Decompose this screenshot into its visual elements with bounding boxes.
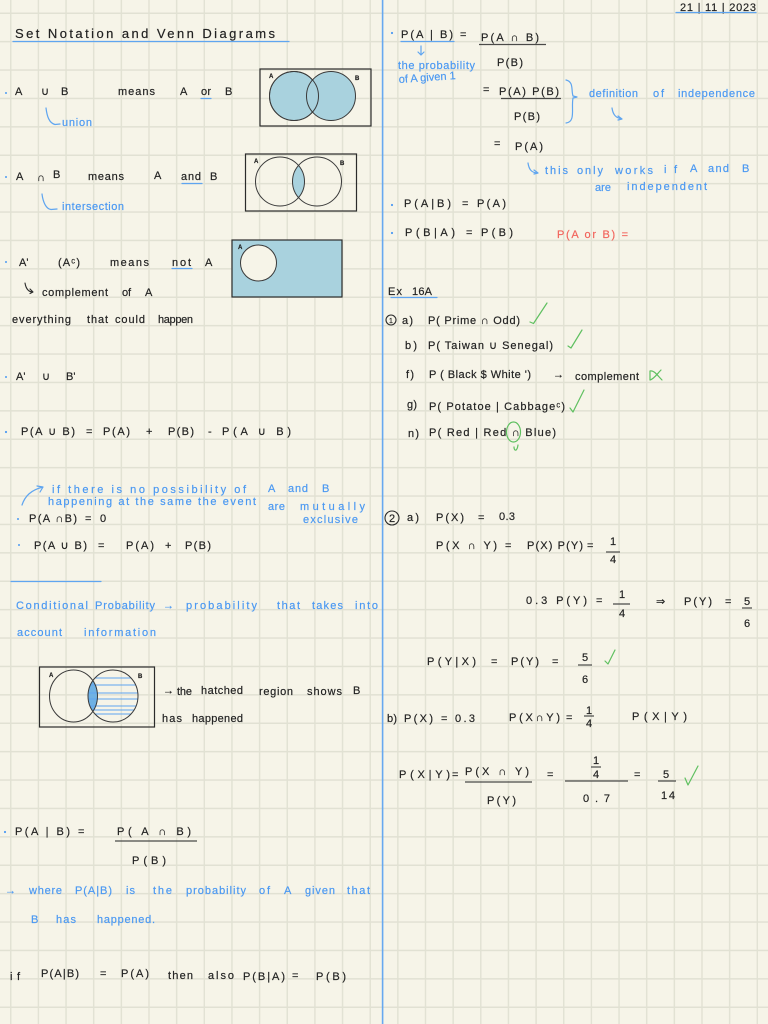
A' union B': ∪	[42, 371, 50, 383]
conditional probability heading: information	[84, 627, 156, 639]
exercise 2a working: 1	[610, 536, 616, 548]
title: Set Notation and Venn Diagrams	[15, 26, 276, 41]
hatched region note: →	[163, 685, 174, 697]
exercise 2a working: =	[725, 596, 731, 608]
venn diagram: hatched B: B	[138, 674, 143, 680]
union definition: or	[201, 86, 211, 98]
intersection definition: ∩	[37, 172, 45, 184]
conditional derivation: P(B)	[497, 57, 523, 69]
exercise 2b working: =	[566, 712, 572, 724]
complement definition: means	[110, 257, 150, 269]
formula explanation: has	[56, 914, 76, 926]
union definition: A	[15, 86, 23, 98]
hatched region note: region	[259, 686, 293, 698]
exercise 2a working: P(Y)	[684, 596, 712, 608]
exercise 1 answers	[386, 303, 662, 450]
mutually exclusive note: if there is no possibility of	[52, 484, 247, 496]
mutually exclusive note: exclusive	[303, 514, 358, 526]
section divider	[11, 580, 101, 582]
complement definition: A	[205, 257, 213, 269]
venn diagram: intersection: A	[254, 159, 259, 165]
intersection definition: means	[88, 171, 124, 183]
independence statement	[10, 968, 346, 983]
annotation: only works if independent: only	[577, 165, 604, 177]
mutually exclusive formulas: +	[165, 540, 171, 552]
annotation: only works if independent: this	[545, 165, 568, 177]
conditional probability formula: P( A ∩ B)	[117, 826, 191, 838]
venn diagram: union: A	[269, 74, 274, 80]
mutually exclusive formulas	[17, 513, 211, 552]
exercise 2a working: =	[478, 512, 484, 524]
conditional probability formula: P(B)	[132, 855, 166, 867]
mutually exclusive formulas: P(A)	[126, 540, 154, 552]
union definition	[5, 86, 232, 129]
exercise 2b working: =	[634, 769, 640, 781]
addition rule: =	[86, 426, 92, 438]
formula explanation: →	[5, 885, 16, 897]
date: 21 | 11 | 2023	[680, 2, 756, 14]
A' union B': A'	[16, 371, 25, 383]
exercise 1 answers: P( Taiwan ∪ Senegal)	[428, 340, 553, 352]
annotation: probability of A given B	[398, 46, 476, 86]
exercise 2b working: =	[441, 713, 447, 725]
exercise 2a working: 4	[619, 608, 625, 620]
question number 1: 1	[389, 318, 393, 325]
formula explanation: happened.	[97, 914, 155, 926]
exercise 2a working	[385, 511, 752, 686]
exercise heading: Ex	[388, 286, 402, 298]
exercise 1 answers: complement	[575, 371, 639, 383]
mutually exclusive note	[22, 483, 366, 526]
complement definition: everything	[12, 314, 71, 326]
annotation: only works if independent: works	[614, 165, 654, 177]
exercise 2a working: 0.3	[499, 511, 515, 523]
formula explanation: that	[347, 885, 370, 897]
exercise 1 answers: n)	[408, 428, 419, 440]
exercise 2b working: 4	[586, 718, 592, 730]
venn diagram: complement: A	[238, 245, 243, 251]
complement definition: (Aᶜ)	[58, 257, 80, 269]
exercise 2a working: P(Y|X)	[427, 656, 476, 668]
intersection definition: and	[181, 171, 201, 183]
formula explanation: given	[305, 885, 335, 897]
exercise 2b working: P(X ∩ Y)	[465, 766, 529, 778]
exercise 2a working: =	[587, 540, 593, 552]
hatched region note: shows	[307, 686, 342, 698]
mutually exclusive formulas: P(A ∩B)	[29, 513, 77, 525]
venn diagram: union: B	[355, 76, 360, 82]
exercise 1 answers: b)	[405, 340, 417, 352]
hatched region note: happened	[192, 713, 243, 725]
red note: P(A or B) =	[557, 229, 628, 241]
exercise 2b working: 0.7	[583, 793, 610, 805]
conditional probability heading: Probability	[95, 600, 156, 612]
annotation: only works if independent: if	[664, 164, 678, 176]
independence statement: =	[292, 970, 298, 982]
hatched region note: hatched	[201, 685, 243, 697]
exercise 2b working: 4	[593, 769, 599, 781]
exercise 2a working: 6	[582, 674, 588, 686]
exercise 2b working	[387, 705, 698, 807]
exercise 2b working: b)	[387, 713, 397, 725]
venn diagram: complement	[232, 240, 342, 297]
mutually exclusive formulas: =	[85, 513, 91, 525]
formula explanation: of	[259, 885, 271, 897]
annotation: only works if independent: independent	[627, 181, 707, 193]
intersection definition: A	[16, 171, 24, 183]
annotation: only works if independent: and	[708, 163, 729, 175]
exercise 2b working: P(X|Y)	[399, 769, 450, 781]
conditional derivation: P(A)	[515, 141, 543, 153]
intersection definition	[5, 169, 217, 213]
conditional derivation: =	[460, 29, 466, 41]
exercise 2a working: P(Y)	[511, 656, 539, 668]
annotation: only works if independent: are	[595, 182, 611, 194]
conditional probability heading: that	[277, 600, 300, 612]
mutually exclusive formulas: 0	[100, 513, 106, 525]
exercise 2a working: P(X)	[436, 512, 464, 524]
conditional derivation: =	[483, 84, 489, 96]
complement definition: complement	[42, 287, 108, 299]
complement definition	[5, 257, 213, 326]
hatched region note	[162, 685, 360, 725]
exercise 2a working: 1	[619, 589, 625, 601]
venn diagram: hatched B: A	[49, 673, 54, 679]
union definition: ∪	[41, 86, 49, 98]
independence statement: if	[10, 971, 21, 983]
conditional derivation: P(B)	[514, 111, 540, 123]
independence results: =	[466, 227, 472, 239]
complement definition: happen	[158, 314, 193, 326]
independence results: P(B|A)	[405, 227, 455, 239]
A' union B'	[5, 371, 75, 383]
question number 1	[386, 315, 396, 325]
exercise 2b working: P(Y)	[487, 795, 516, 807]
exercise 2b working: P(X|Y)	[632, 711, 687, 723]
union definition: B	[225, 86, 232, 98]
exercise 1 answers: P ( Black $ White ')	[429, 369, 531, 381]
conditional derivation: P(A) P(B)	[499, 86, 559, 98]
exercise 2a working: 4	[610, 554, 616, 566]
exercise heading	[388, 286, 437, 298]
mutually exclusive note: mutually	[300, 501, 366, 513]
formula explanation: where	[28, 885, 62, 897]
conditional probability heading: account	[17, 627, 62, 639]
union definition: A	[180, 86, 188, 98]
conditional probability formula	[4, 826, 197, 867]
exercise 2a working: P(X) P(Y)	[527, 540, 583, 552]
independence statement: P(B)	[316, 971, 346, 983]
exercise 2b working: 0.3	[455, 713, 475, 725]
addition rule: P(A ∪ B)	[222, 426, 291, 438]
exercise 1 answers: g)	[407, 399, 417, 411]
exercise 1 answers: a)	[402, 315, 413, 327]
formula explanation: P(A|B)	[75, 885, 112, 897]
conditional derivation: P(A ∩ B)	[481, 32, 539, 44]
exercise 2b working: 1	[586, 705, 592, 717]
conditional probability formula: =	[78, 826, 84, 838]
A' union B': B'	[66, 371, 75, 383]
exercise 2b working: =	[452, 769, 458, 781]
addition rule	[5, 426, 291, 438]
conditional probability heading: →	[163, 600, 174, 612]
exercise 2b working: P(X)	[404, 713, 433, 725]
formula explanation: B	[31, 914, 38, 926]
exercise 2b working: 14	[661, 790, 675, 802]
mutually exclusive note: A	[268, 483, 276, 495]
intersection definition: intersection	[62, 201, 124, 213]
independence results: P(A)	[477, 198, 506, 210]
hatched region note: B	[353, 685, 360, 697]
annotation: probability of A given B: the probability	[398, 60, 476, 72]
annotation: probability of A given B: of A given 1	[398, 70, 456, 86]
exercise 2a working: 0.3 P(Y)	[526, 595, 587, 607]
union definition: union	[62, 117, 92, 129]
exercise 2a working: =	[491, 656, 497, 668]
formula explanation: probability	[186, 885, 246, 897]
complement definition: could	[115, 314, 145, 326]
conditional probability heading: into	[355, 600, 378, 612]
mutually exclusive formulas: P(B)	[185, 540, 211, 552]
exercise 1 answers: P( Prime ∩ Odd)	[428, 315, 520, 327]
venn diagram: intersection	[246, 154, 356, 211]
mutually exclusive note: B	[322, 483, 329, 495]
independence results: P(A|B)	[404, 198, 451, 210]
exercise 2b working: 5	[663, 769, 669, 781]
exercise 1 answers: f)	[406, 369, 414, 381]
conditional probability heading: probability	[186, 600, 258, 612]
conditional probability formula: P(A | B)	[15, 826, 70, 838]
exercise 2a working: P(X ∩ Y)	[436, 540, 497, 552]
venn diagram: intersection: B	[340, 161, 345, 167]
addition rule: P(A ∪ B)	[21, 426, 75, 438]
exercise 2a working: =	[596, 595, 602, 607]
conditional probability heading: takes	[312, 600, 344, 612]
question number 2	[385, 511, 399, 525]
annotation: definition of independence: definition	[589, 88, 638, 100]
exercise 2b working: P(X∩Y)	[509, 712, 560, 724]
exercise 2b working: =	[547, 769, 553, 781]
formula explanation: is	[126, 885, 136, 897]
exercise 2b working: 1	[593, 755, 599, 767]
independence statement: P(A|B)	[41, 968, 79, 980]
formula explanation	[5, 885, 370, 926]
exercise heading: 16A	[412, 286, 433, 298]
union definition: B	[61, 86, 68, 98]
annotation: only works if independent	[528, 163, 749, 194]
complement definition: A	[145, 287, 153, 299]
conditional derivation: =	[494, 138, 500, 150]
independence statement: P(A)	[121, 968, 149, 980]
complement definition: of	[122, 287, 132, 299]
conditional derivation: P(A | B)	[401, 29, 453, 41]
complement definition: that	[87, 314, 108, 326]
independence statement: =	[100, 968, 106, 980]
annotation: only works if independent: B	[742, 163, 749, 175]
independence results: P(B)	[481, 227, 513, 239]
exercise 2a working: ⇒	[656, 596, 665, 608]
conditional probability heading: Conditional	[16, 600, 88, 612]
exercise 2a working: =	[552, 656, 558, 668]
mutually exclusive formulas: P(A ∪ B)	[34, 540, 87, 552]
formula explanation: A	[284, 885, 292, 897]
annotation: definition of independence: of	[653, 88, 665, 100]
independence results	[391, 198, 513, 239]
exercise 2a working: 5	[744, 596, 750, 608]
independence results: =	[462, 198, 468, 210]
mutually exclusive note: and	[288, 483, 308, 495]
intersection definition: A	[154, 170, 162, 182]
annotation: definition of independence	[566, 80, 755, 123]
conditional derivation	[391, 29, 561, 153]
annotation: definition of independence: independence	[678, 88, 755, 100]
hatched region note: the	[177, 686, 192, 698]
hatched region note: has	[162, 713, 182, 725]
exercise 1 answers: →	[553, 369, 564, 381]
exercise 2a working: =	[505, 540, 511, 552]
question number 2: 2	[389, 513, 395, 525]
exercise 2a working: 6	[744, 618, 750, 630]
addition rule: P(B)	[168, 426, 194, 438]
union definition: means	[118, 86, 156, 98]
independence statement: also	[208, 970, 234, 982]
independence statement: then	[168, 970, 193, 982]
mutually exclusive formulas: =	[98, 540, 104, 552]
annotation: only works if independent: A	[690, 163, 698, 175]
formula explanation: the	[153, 885, 172, 897]
conditional probability heading	[16, 600, 378, 639]
mutually exclusive note: are	[268, 501, 285, 513]
exercise 1 answers: P( Potatoe | Cabbageᶜ)	[429, 401, 565, 413]
exercise 2a working: 5	[582, 652, 588, 664]
complement definition: not	[172, 257, 191, 269]
independence statement: P(B|A)	[243, 971, 285, 983]
exercise 2a working: a)	[407, 512, 419, 524]
mutually exclusive note: happening at the same the event	[48, 496, 256, 508]
addition rule: +	[146, 426, 152, 438]
addition rule: P(A)	[103, 426, 130, 438]
addition rule: -	[208, 426, 212, 438]
venn diagram: hatched B	[40, 667, 154, 727]
venn diagram: union	[260, 69, 371, 126]
exercise 1 answers: P( Red | Red ∩ Blue)	[429, 427, 556, 439]
intersection definition: B	[210, 171, 217, 183]
complement definition: A'	[19, 257, 28, 269]
intersection definition: B	[53, 169, 60, 181]
